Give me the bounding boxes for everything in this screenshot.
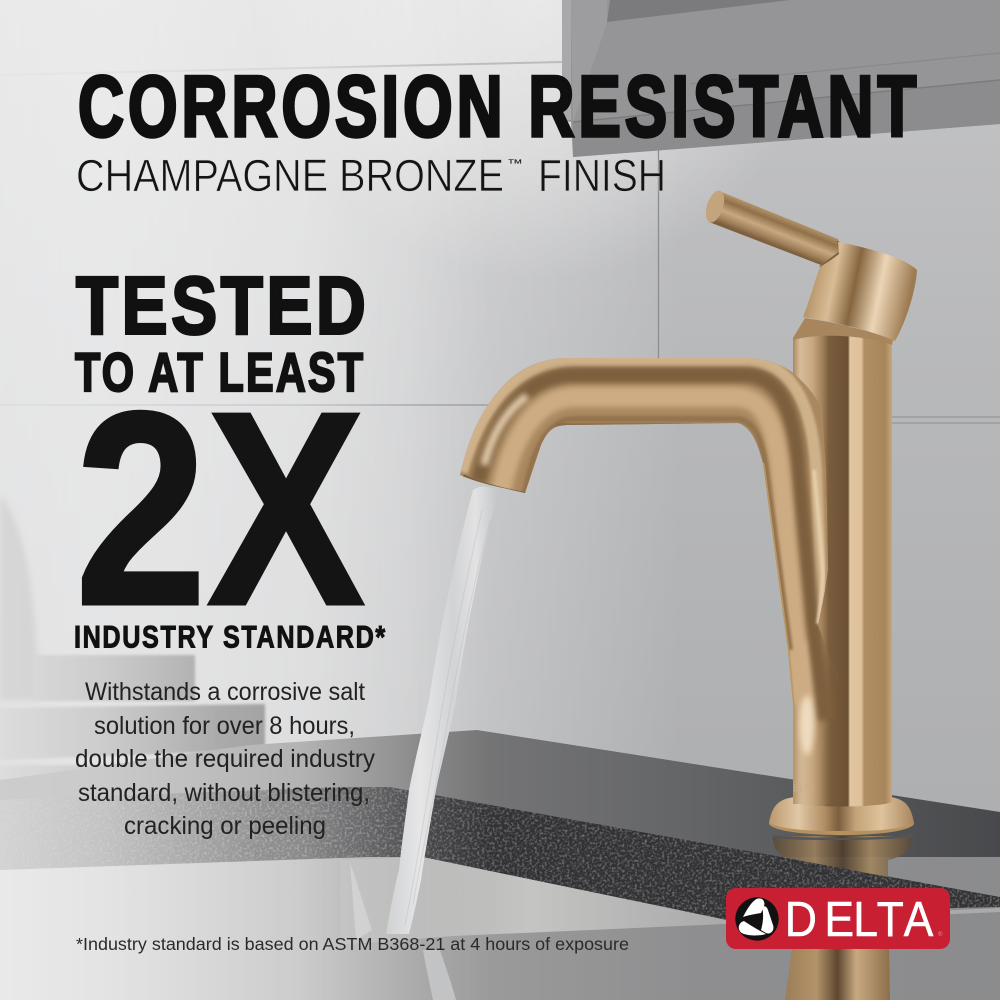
left background objects — [0, 495, 265, 800]
subheading: champagne bronze finish: CHAMPAGNE BRONZE — [76, 150, 504, 201]
handle body — [803, 242, 917, 341]
headline: tested: TESTED — [76, 260, 366, 352]
body text: double the required industry — [75, 745, 375, 773]
label: industry standard: INDUSTRY STANDARD* — [74, 620, 386, 655]
water stream — [386, 486, 498, 1000]
wordmark: DELTA — [785, 891, 934, 947]
footnote: *Industry standard is based on ASTM B368-21 at 4 hours of exposure — [76, 934, 629, 954]
headline: to at least: TO AT LEAST — [75, 343, 363, 403]
wall tile lines — [0, 62, 1000, 423]
icon: Delta tri-drop mark — [735, 897, 779, 941]
water streaks — [405, 510, 490, 925]
sink basin — [0, 857, 1000, 1000]
body text: standard, without blistering, — [78, 779, 370, 807]
body text: solution for over 8 hours, — [94, 712, 355, 740]
embossed DELTA mark: ELTA — [793, 783, 814, 793]
subheading: champagne bronze finish: ™ — [507, 158, 523, 170]
body text — [75, 678, 375, 840]
wall cabinet — [562, 0, 1000, 157]
faucet base — [769, 797, 914, 840]
counter front edge — [0, 787, 1000, 920]
counter top surface — [0, 730, 1000, 897]
big number: 2X: 2X — [75, 355, 366, 663]
logo: Delta: ® — [938, 931, 943, 938]
handle lever — [702, 188, 840, 267]
subheading: champagne bronze finish: FINISH — [538, 150, 666, 201]
body text: Withstands a corrosive salt — [85, 678, 365, 706]
faucet column — [793, 318, 892, 806]
heading: corrosion resistant: CORROSION RESISTANT — [78, 60, 916, 155]
spout tube — [450, 350, 850, 810]
faucet collar — [793, 318, 893, 345]
logo: Delta — [726, 888, 950, 949]
faucet — [450, 188, 917, 1000]
body text: cracking or peeling — [124, 812, 326, 840]
faucet base reflection — [773, 836, 912, 1000]
